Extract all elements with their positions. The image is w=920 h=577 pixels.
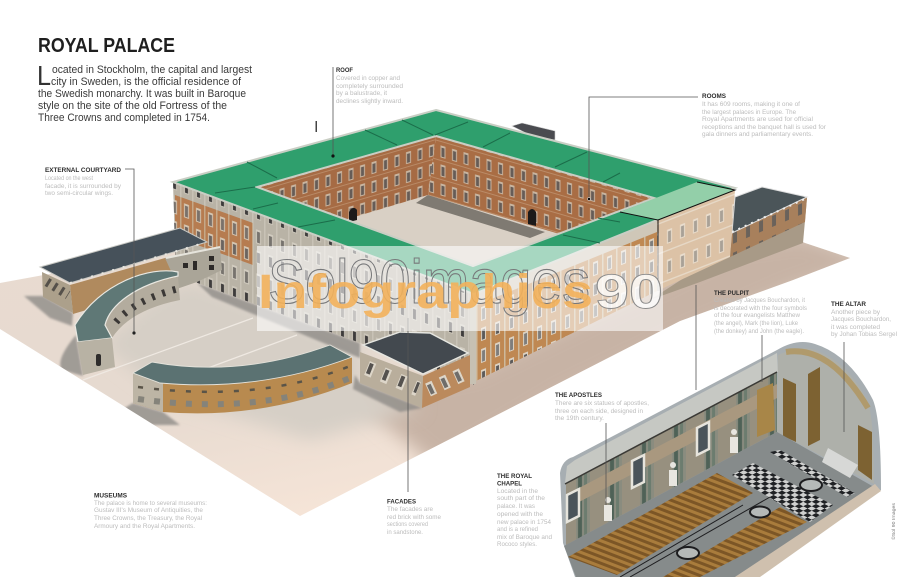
callout: royal chapel: Located in the xyxy=(497,489,539,495)
callout: royal chapel xyxy=(497,473,552,548)
callout: altar: by Johan Tobias Sergel xyxy=(831,332,897,338)
wing wall brick xyxy=(730,197,807,257)
window frames right xyxy=(428,372,468,390)
bench block right xyxy=(663,507,807,577)
block openings xyxy=(183,256,214,270)
apostle statues xyxy=(604,429,738,521)
callout: external courtyard xyxy=(45,167,136,335)
callout: pulpit: Created by Jacques Bouchardon, it xyxy=(714,298,805,304)
watermark outline text: Sol90images xyxy=(268,248,590,317)
cornice xyxy=(166,247,220,258)
callout: roof xyxy=(331,67,403,158)
checker floor right xyxy=(770,450,855,497)
callout: external courtyard: facade, it is surrounded by xyxy=(45,184,121,190)
title: ROYAL PALACE xyxy=(38,34,175,57)
watermark number: 90 xyxy=(595,266,663,319)
callout: altar: Jacques Bouchardon, xyxy=(831,317,891,323)
chapel windows xyxy=(567,422,709,522)
drop cap: L xyxy=(37,60,51,91)
callout: royal chapel: palace. It was xyxy=(497,504,535,510)
section wall xyxy=(657,190,735,291)
callout: altar: Another piece by xyxy=(831,310,880,316)
intro text block: Three Crowns and completed in 1754. xyxy=(38,112,210,124)
outer left wall xyxy=(173,183,474,385)
wing end wall xyxy=(42,272,73,313)
roof seams xyxy=(215,120,620,243)
windows right xyxy=(429,372,468,390)
callout: rooms xyxy=(587,93,826,201)
end wall windows xyxy=(47,282,68,295)
right low wing xyxy=(650,187,807,300)
callout: roof: Covered in copper and xyxy=(336,76,400,82)
front pavilion xyxy=(360,332,470,408)
callout: external courtyard: two semi-circular wings. xyxy=(45,191,113,197)
callout: facades: The facades are xyxy=(387,507,434,513)
curved wing upper xyxy=(75,271,180,375)
intro text block: the Swedish monarchy. It was built in Baroque xyxy=(38,88,246,100)
watermark orange text: Infographics xyxy=(258,266,593,319)
inner facade xyxy=(105,277,180,338)
window row bottom xyxy=(138,378,350,404)
copper roof xyxy=(173,110,735,294)
intro text block: city in Sweden, is the official residence of xyxy=(51,76,241,88)
callout: facades: FACADES xyxy=(387,498,417,506)
callout: royal chapel: THE ROYAL xyxy=(497,473,532,480)
wing roof xyxy=(40,228,207,283)
building shadows xyxy=(24,283,422,425)
pulpit xyxy=(757,383,775,437)
watermark xyxy=(257,246,663,331)
callout: external courtyard: EXTERNAL COURTYARD xyxy=(45,167,121,174)
courtyard floor shadow xyxy=(416,195,545,238)
wing roof xyxy=(732,187,807,233)
bench block left xyxy=(568,473,753,575)
callout: pulpit: THE PULPIT xyxy=(714,290,749,297)
wing brick front xyxy=(70,258,175,314)
callout: roof: by a balustrade, it xyxy=(336,91,387,97)
callout: rooms: It has 609 rooms, making it one of xyxy=(702,102,800,108)
right wall frieze xyxy=(474,220,657,306)
callout: museums: The palace is home to several museums: xyxy=(94,501,207,507)
inner wall right xyxy=(428,136,654,262)
callout: apostles xyxy=(555,285,696,505)
roof xyxy=(363,332,468,374)
courtyard floor xyxy=(250,195,654,320)
floor xyxy=(564,432,874,577)
floor edge xyxy=(735,484,881,577)
wing wall stone base xyxy=(650,198,807,300)
callout: pulpit: (the angel), Mark (the lion), Luke xyxy=(714,321,799,327)
intro text block: style on the site of the old Fortress of the xyxy=(38,100,227,112)
callout: museums: Three Crowns, the Treasury, the Royal xyxy=(94,516,202,522)
wall left xyxy=(360,352,423,408)
wall right xyxy=(422,355,470,408)
curved wing lower xyxy=(133,345,352,413)
end pavilion xyxy=(77,338,115,375)
window row top xyxy=(138,366,350,392)
left back wing xyxy=(40,228,222,314)
windows left xyxy=(368,368,418,388)
cornice xyxy=(565,372,777,484)
end wall xyxy=(777,348,874,484)
callout: royal chapel: and is a refined xyxy=(497,527,538,533)
callout: facades xyxy=(387,318,442,536)
callout: external courtyard: Located on the west xyxy=(45,176,93,182)
callout: facades: sections covered xyxy=(387,522,428,528)
callout: rooms: the largest palaces in Europe. The xyxy=(702,110,797,116)
callout: rooms: ROOMS xyxy=(702,93,727,100)
roof xyxy=(133,345,352,385)
long wall xyxy=(566,372,777,545)
facade windows xyxy=(116,289,177,322)
front courtyard paving xyxy=(100,280,422,440)
callout: altar: it was completed xyxy=(831,325,880,331)
callout: pulpit: (the donkey) and John (the eagle). xyxy=(714,329,804,335)
outer left wall brick section xyxy=(175,195,253,265)
pavilion window xyxy=(96,354,101,366)
rear pavilion xyxy=(512,123,555,140)
stone block xyxy=(165,248,222,293)
window frames left xyxy=(367,368,418,389)
altar xyxy=(822,448,858,478)
callout: royal chapel: mix of Baroque and xyxy=(497,535,552,541)
outer right wall xyxy=(474,220,657,382)
callout: museums xyxy=(94,492,207,530)
wing balustrade xyxy=(70,242,207,283)
callout: royal chapel: CHAPEL xyxy=(497,480,522,488)
callout: facades: in sandstone. xyxy=(387,530,423,536)
callout: museums: MUSEUMS xyxy=(94,492,128,500)
floor medallions xyxy=(677,479,822,559)
callout: royal chapel: south part of the xyxy=(497,496,546,502)
callout: museums: Armoury and the Royal Apartments. xyxy=(94,524,195,530)
wing balustrade xyxy=(732,198,807,232)
ground right shaded xyxy=(376,242,850,458)
brick wall xyxy=(133,357,352,413)
outer shell xyxy=(560,342,881,577)
callout: pulpit: of the four evangelists Matthew xyxy=(714,313,801,319)
chapel cutaway xyxy=(560,342,881,577)
courtyard stripes xyxy=(83,318,297,380)
callout: roof: completely surrounded xyxy=(336,84,403,90)
flag xyxy=(316,121,317,132)
callout: altar xyxy=(831,301,897,432)
intro text block: ocated in Stockholm, the capital and largest xyxy=(52,64,252,76)
callout: royal chapel: new palace in 1754 xyxy=(497,520,552,526)
callout: altar: THE ALTAR xyxy=(831,301,866,308)
callout: royal chapel: opened with the xyxy=(497,512,544,518)
lit roof section xyxy=(620,182,735,220)
callout: apostles: three on each side, designed in xyxy=(555,409,643,415)
inner wall left xyxy=(250,136,436,248)
aisle lines xyxy=(620,497,770,577)
callout: rooms: Royal Apartments are used for official xyxy=(702,117,813,123)
callout: museums: Gustav III's Museum of Antiquities, the xyxy=(94,508,204,514)
credit: ©Sol 90 Images xyxy=(890,502,897,540)
watermark panel xyxy=(257,246,663,331)
vault band xyxy=(565,353,778,483)
section cut outline xyxy=(620,182,735,291)
callout: rooms: receptions and the banquet hall is used for xyxy=(702,125,826,131)
callout: rooms: gala dinners and parliamentary events. xyxy=(702,132,813,138)
callout: apostles: the 19th century. xyxy=(555,416,604,422)
main palace xyxy=(173,110,735,385)
intro text block xyxy=(37,60,252,124)
callout: facades: red brick with some xyxy=(387,515,442,521)
end wall gold panels xyxy=(783,367,872,480)
vault gold ornament xyxy=(786,351,868,408)
callout: pulpit: is decorated with the four symbols xyxy=(714,306,807,312)
front corner pilaster xyxy=(470,294,476,384)
callout: roof: ROOF xyxy=(336,67,353,74)
curved roof xyxy=(75,271,178,342)
callout: pulpit xyxy=(714,290,807,382)
callout: royal chapel: Rococo styles. xyxy=(497,542,537,548)
ground plane xyxy=(0,234,850,516)
callout: apostles: There are six statues of apostles, xyxy=(555,401,649,407)
stone end xyxy=(133,373,163,412)
courtyard doors xyxy=(349,208,536,226)
callout: roof: declines slightly inward. xyxy=(336,99,403,105)
callout: apostles: THE APOSTLES xyxy=(555,392,603,399)
checker floor left xyxy=(732,463,833,522)
